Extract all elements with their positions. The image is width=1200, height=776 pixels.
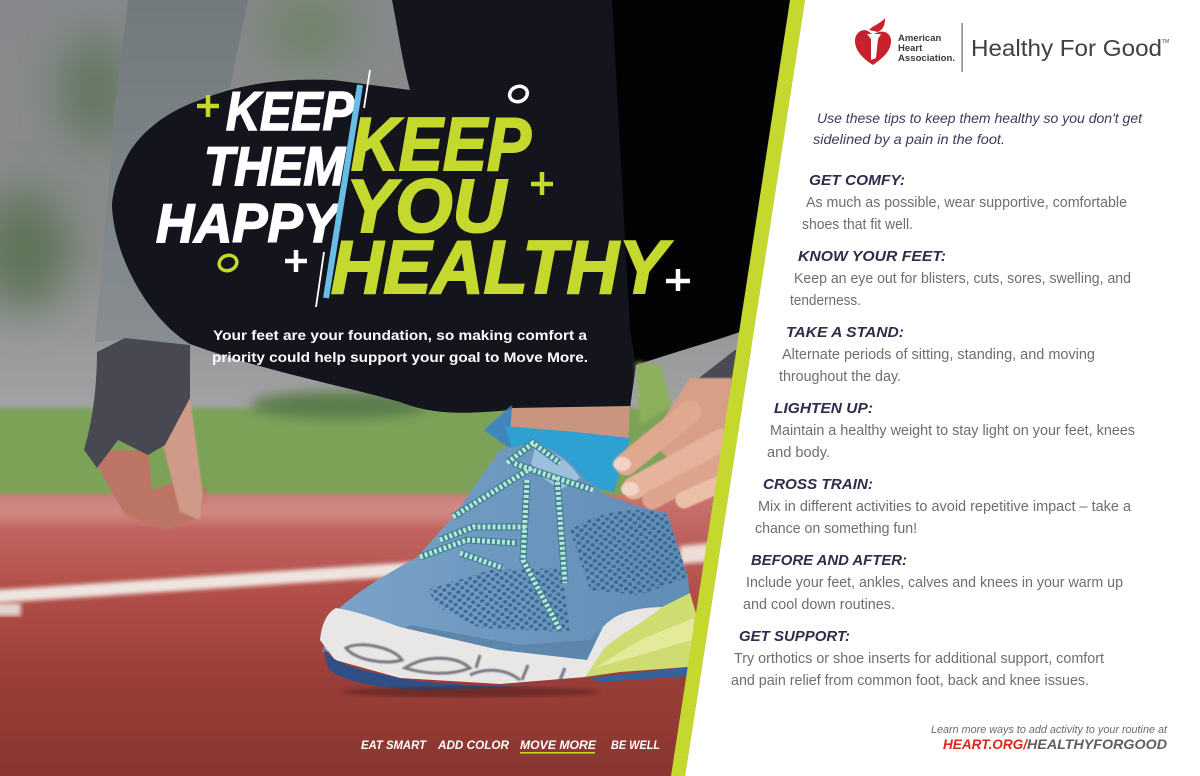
headline: keep you healthy: KEEP bbox=[351, 102, 532, 186]
logo: American Heart Association: TM bbox=[1162, 39, 1169, 45]
icon: heart and torch bbox=[855, 18, 891, 65]
right rear sleeve bbox=[698, 350, 751, 386]
headline: keep you healthy: HEALTHY bbox=[331, 225, 673, 309]
white sole bbox=[320, 607, 662, 684]
tip: lighten up bbox=[767, 400, 1135, 461]
shadowed leggings bbox=[612, 0, 790, 365]
midfoot band bbox=[400, 625, 600, 662]
right hand bbox=[613, 378, 732, 500]
ankle bbox=[510, 406, 630, 438]
lime diagonal band bbox=[671, 0, 805, 776]
headline: keep you healthy: YOU bbox=[346, 164, 508, 248]
left hand bbox=[90, 396, 207, 530]
subheading: priority could help support your goal to Move More. bbox=[212, 349, 588, 365]
blue slash divider bbox=[326, 85, 360, 298]
navigation: MOVE MORE bbox=[520, 738, 597, 752]
navigation: EAT SMART bbox=[361, 738, 428, 752]
headline: keep them happy: HAPPY bbox=[156, 192, 342, 254]
navigation: BE WELL bbox=[611, 738, 660, 752]
tip: know your feet: KNOW YOUR FEET: bbox=[798, 248, 946, 265]
footer call to action: HEART.ORG/ bbox=[943, 736, 1029, 752]
intro text: Use these tips to keep them healthy so you don't get bbox=[817, 110, 1143, 126]
intro text: sidelined by a pain in the foot. bbox=[813, 131, 1005, 147]
navigation: ADD COLOR bbox=[437, 738, 509, 752]
navigation bbox=[361, 740, 660, 754]
white plus right bbox=[666, 269, 690, 291]
headline: keep them happy: KEEP bbox=[226, 80, 354, 142]
tip: take a stand: Alternate periods of sitting, standing, and moving bbox=[782, 347, 1095, 363]
tip: get support: Try orthotics or shoe inserts for additional support, comfort bbox=[734, 651, 1104, 667]
headline: keep them happy: THEM bbox=[204, 135, 346, 197]
rear shoe heel bbox=[636, 362, 672, 425]
tip: know your feet: tenderness. bbox=[790, 293, 861, 309]
green heel bbox=[585, 593, 697, 677]
laces bbox=[420, 443, 593, 630]
tip: know your feet: Keep an eye out for blisters, cuts, sores, swelling, and bbox=[794, 271, 1131, 287]
association name: Association. bbox=[898, 53, 955, 64]
tongue mesh bbox=[530, 448, 580, 490]
logo: American Heart Association bbox=[855, 18, 1169, 72]
white slash top bbox=[364, 70, 370, 108]
subheading bbox=[212, 327, 588, 365]
headline: keep them happy bbox=[156, 80, 354, 254]
healthy for good wordmark: Healthy For Good bbox=[971, 35, 1162, 61]
tip: get comfy bbox=[802, 172, 1127, 233]
mesh panels bbox=[427, 510, 688, 632]
tip: before and after bbox=[743, 552, 1123, 613]
white circle bbox=[507, 84, 530, 104]
association name: Heart bbox=[898, 43, 923, 54]
footer call to action bbox=[931, 724, 1168, 752]
shoe upper bbox=[322, 443, 690, 665]
tip: cross train: chance on something fun! bbox=[755, 521, 917, 537]
blue sock bbox=[505, 426, 630, 492]
subheading: Your feet are your foundation, so making comfort a bbox=[213, 327, 587, 343]
lime plus right bbox=[531, 172, 553, 195]
tip: cross train: CROSS TRAIN: bbox=[763, 476, 873, 493]
dark cuff bbox=[84, 338, 190, 468]
association name bbox=[898, 33, 955, 64]
tip: take a stand: throughout the day. bbox=[779, 369, 901, 385]
headline: keep you healthy bbox=[331, 102, 673, 309]
white slash bottom bbox=[316, 252, 324, 307]
footer call to action: HEALTHYFORGOOD bbox=[1027, 736, 1167, 752]
blurred background bbox=[0, 0, 830, 776]
tip: get support: and pain relief from common foot, back and knee issues. bbox=[731, 673, 1089, 689]
intro text bbox=[813, 110, 1143, 147]
grey sleeve bbox=[95, 0, 248, 344]
tip: lighten up: LIGHTEN UP: bbox=[774, 400, 873, 417]
black leggings bbox=[112, 0, 790, 413]
tip: cross train: Mix in different activities to avoid repetitive impact – take a bbox=[758, 499, 1132, 515]
tip: get comfy: GET COMFY: bbox=[809, 172, 905, 189]
white plus lower bbox=[285, 250, 307, 272]
tip: get comfy: shoes that fit well. bbox=[802, 217, 913, 233]
tip: before and after: Include your feet, ankles, calves and knees in your warm up bbox=[746, 575, 1123, 591]
tip: get support: GET SUPPORT: bbox=[739, 628, 850, 645]
tip: know your feet bbox=[790, 248, 1131, 309]
association name: American bbox=[898, 33, 941, 44]
tip: get support bbox=[731, 628, 1104, 689]
tip: lighten up: Maintain a healthy weight to stay light on your feet, knees bbox=[770, 423, 1135, 439]
sole tread bbox=[346, 645, 565, 680]
footer call to action: Learn more ways to add activity to your routine at bbox=[931, 724, 1168, 736]
tip: take a stand: TAKE A STAND: bbox=[786, 324, 904, 341]
tip: lighten up: and body. bbox=[767, 445, 830, 461]
tip: before and after: and cool down routines. bbox=[743, 597, 895, 613]
tip: take a stand bbox=[779, 324, 1095, 385]
lime plus left bbox=[197, 95, 219, 117]
panel: photo of runner tying shoe bbox=[0, 0, 830, 776]
blue outsole bbox=[323, 647, 540, 690]
tip: before and after: BEFORE AND AFTER: bbox=[751, 552, 907, 569]
tip: cross train bbox=[755, 476, 1132, 537]
tip: get comfy: As much as possible, wear supportive, comfortable bbox=[806, 195, 1127, 211]
lime circle bbox=[217, 253, 239, 273]
